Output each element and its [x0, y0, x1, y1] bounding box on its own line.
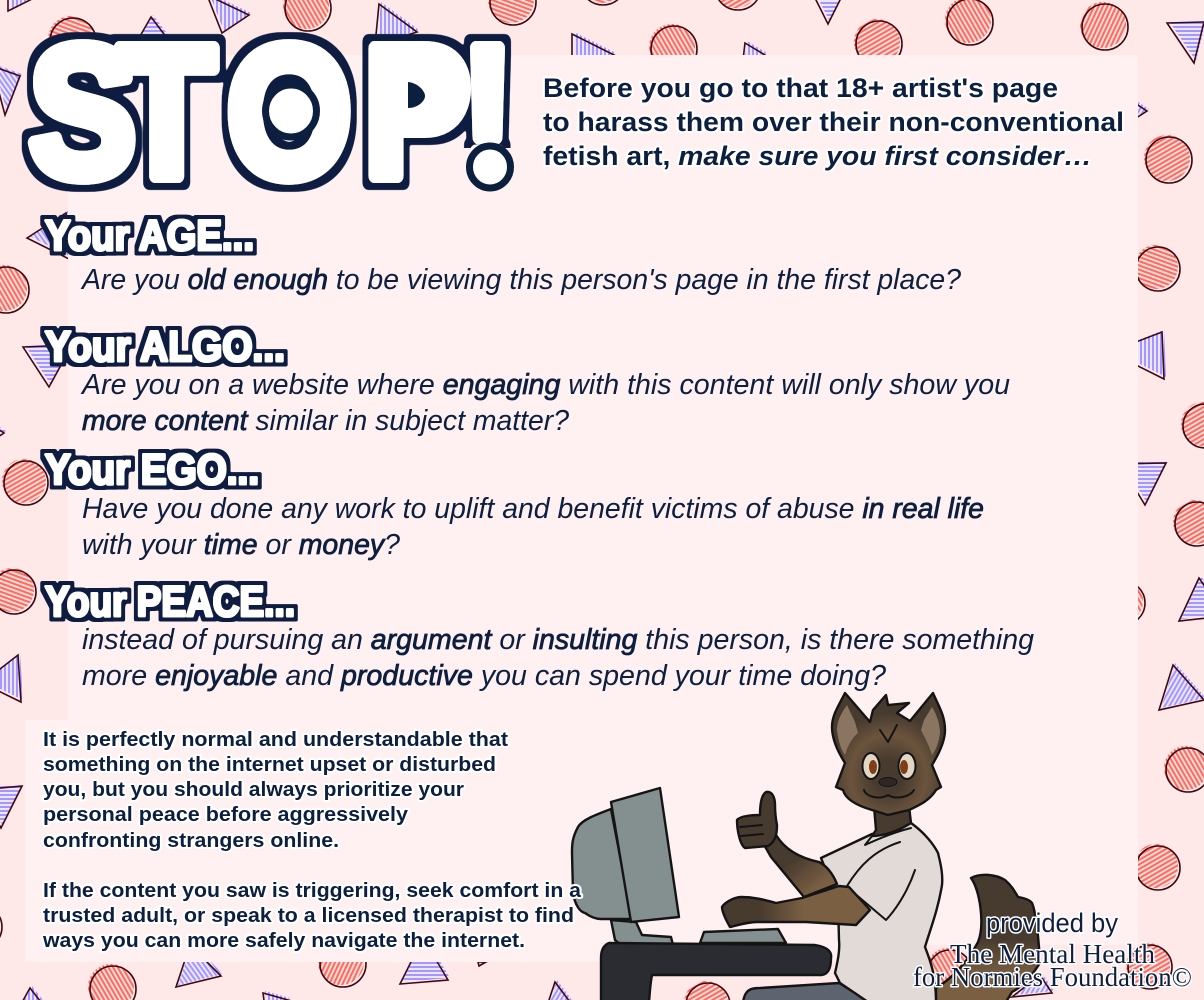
mouth: [864, 790, 914, 797]
text block: closing note: personal peace before aggressively: [43, 804, 409, 826]
title O counter ring: [266, 85, 316, 137]
eyes: [862, 753, 916, 779]
intro text: Before you go to that 18+ artist's page: [543, 73, 1058, 103]
intro text: fetish art, make sure you first consider…: [543, 141, 1092, 171]
text: peace question: [82, 624, 1034, 692]
text block: closing note: trusted adult, or speak to a licensed therapist to find: [43, 905, 574, 927]
title: STOP!: T: [118, 8, 216, 216]
credit: provided by: The Mental Health: [950, 939, 1155, 969]
keyboard: [700, 929, 786, 943]
text block: closing note: ways you can more safely navigate the internet.: [42, 930, 525, 952]
computer monitor: [572, 788, 679, 945]
text block: closing note: If the content you saw is triggering, seek comfort in a: [43, 880, 582, 902]
title exclamation dot: [460, 146, 516, 194]
thumbs-up hand: [737, 792, 777, 848]
typing arm and hand: [722, 886, 870, 927]
desk: [601, 943, 831, 1000]
text: algo question: [80, 369, 1010, 437]
text: ego question: Have you done any work to uplift and benefit victims of abuse in real life: [82, 493, 984, 525]
text: peace question: more enjoyable and productive you can spend your time doing?: [82, 660, 887, 692]
nose: [879, 778, 897, 786]
illustration: canine character at a computer: [572, 693, 1040, 1000]
inner ears: [837, 705, 940, 755]
text: age question: Are you old enough to be viewing this person's page in the first place?: [80, 264, 962, 296]
heading: Your AGE: Your AGE...: [45, 212, 254, 260]
text: algo question: Are you on a website where engaging with this content will only show you: [80, 369, 1010, 401]
shirt: [821, 823, 942, 1000]
title: STOP!: P: [364, 8, 470, 216]
credit: provided by: provided by: [986, 908, 1118, 938]
title: STOP!: O: [227, 8, 351, 216]
text block: closing note: It is perfectly normal and understandable that: [43, 729, 508, 751]
intro text: to harass them over their non-conventional: [543, 107, 1124, 137]
intro text: [543, 73, 1124, 171]
text: peace question: instead of pursuing an argument or insulting this person, is there something: [82, 624, 1034, 656]
text block: closing note: confronting strangers online.: [43, 830, 339, 852]
credit: provided by: for Normies Foundation©: [913, 962, 1192, 992]
heading: Your PEACE: Your PEACE...: [45, 578, 295, 626]
shirt details: [847, 828, 915, 920]
text block: closing note: something on the internet upset or disturbed: [43, 754, 496, 776]
text: ego question: with your time or money?: [82, 529, 401, 561]
title P counter: [398, 68, 442, 116]
title: STOP!: !: [461, 8, 514, 216]
raised arm: [763, 835, 837, 897]
hair fringe line: [880, 725, 897, 742]
heading: Your ALGO: Your ALGO...: [45, 323, 285, 371]
heading: Your EGO: Your EGO...: [45, 446, 259, 494]
text block: closing note: [42, 729, 582, 952]
title: STOP!: S: [29, 8, 136, 216]
text: algo question: more content similar in subject matter?: [82, 405, 570, 437]
credit: provided by: [913, 908, 1192, 992]
head: [832, 693, 945, 815]
neck: [872, 806, 911, 836]
pants: [743, 983, 870, 1000]
tail: [936, 875, 1040, 1000]
text block: closing note: you, but you should always prioritize your: [43, 779, 464, 801]
text: ego question: [82, 493, 984, 561]
